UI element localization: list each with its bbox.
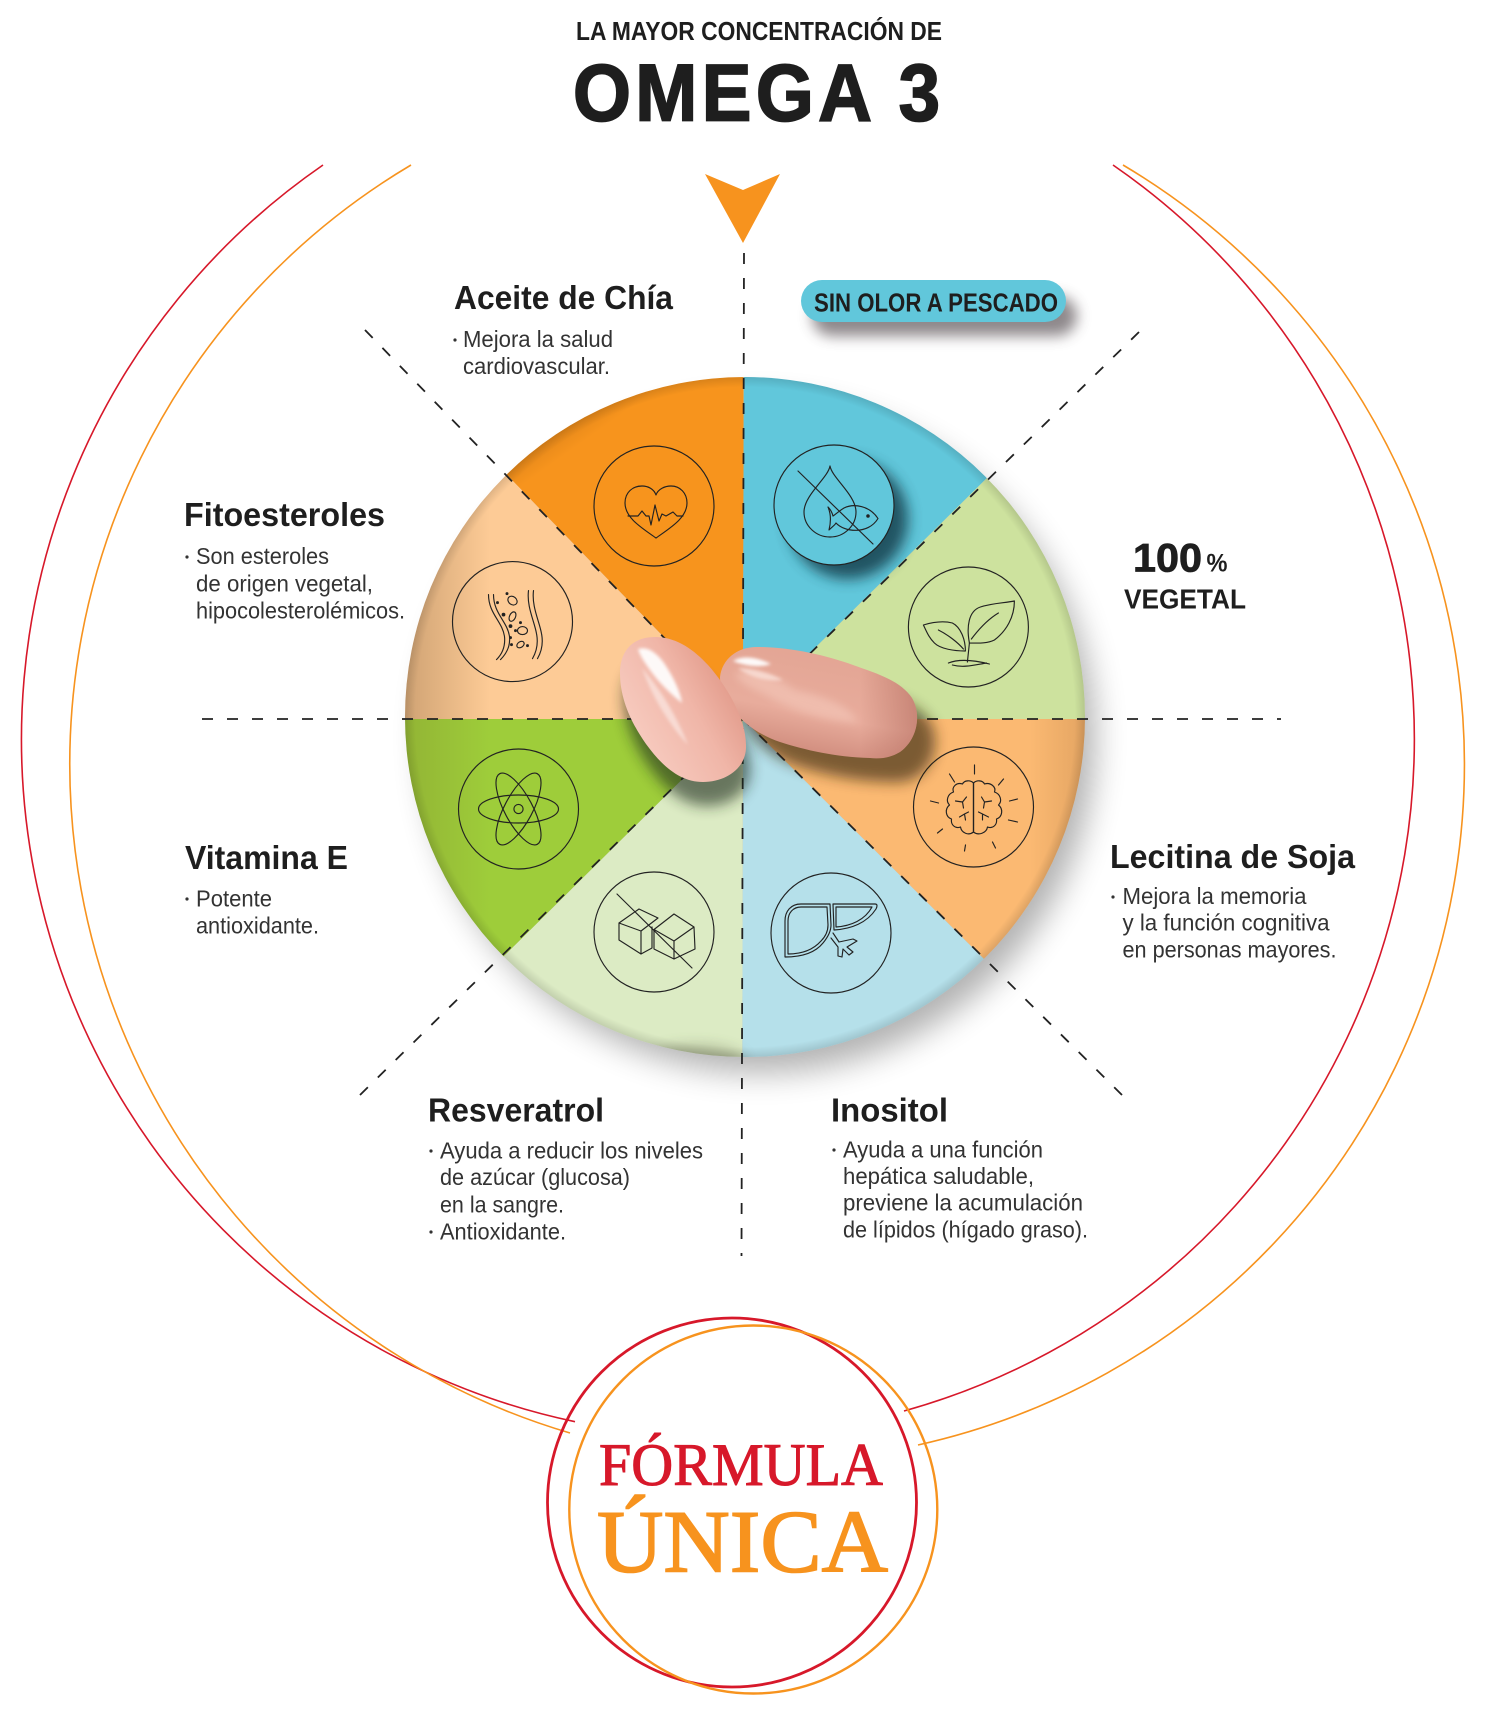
callout: 100% vegetal — [1124, 536, 1246, 614]
text block: fitoesteroles — [184, 496, 405, 624]
text block: inositol: de lípidos (hígado graso). — [843, 1216, 1088, 1242]
icon: brain — [914, 747, 1034, 867]
title: la mayor concentración de: LA MAYOR CONCENTRACIÓN DE — [576, 16, 942, 46]
dashed horizontal divider — [202, 718, 1281, 720]
pie chart — [405, 377, 1085, 1057]
text block: vitamina e: antioxidante. — [196, 912, 319, 938]
badge: sin olor a pescado: SIN OLOR A PESCADO — [814, 288, 1058, 318]
callout: 100% vegetal: % — [1206, 550, 1228, 578]
text block: inositol: Inositol — [831, 1092, 948, 1128]
text block: inositol: hepática saludable, — [843, 1163, 1034, 1189]
text block: fitoesteroles: Fitoesteroles — [184, 496, 385, 533]
icon: heart with pulse — [594, 446, 714, 566]
text block: aceite de chía — [453, 279, 674, 379]
text block: aceite de chía: Mejora la salud — [463, 326, 613, 352]
text block: vitamina e: Vitamina E — [185, 839, 348, 876]
badge: sin olor a pescado — [801, 280, 1077, 336]
text block: resveratrol: Antioxidante. — [440, 1218, 566, 1244]
text block: inositol — [831, 1092, 1088, 1242]
capsule: left — [620, 637, 746, 782]
arrow pointing down — [705, 174, 780, 243]
seal: fórmula única: FÓRMULA — [599, 1432, 883, 1498]
icon: no fish smell — [774, 445, 908, 579]
text block: lecitina de soja: y la función cognitiva — [1122, 910, 1330, 936]
text block: resveratrol: en la sangre. — [440, 1192, 564, 1218]
text block: aceite de chía: Aceite de Chía — [454, 279, 674, 316]
icon: no sugar cubes — [594, 872, 714, 992]
seal: fórmula única: ÚNICA — [597, 1494, 888, 1592]
text block: aceite de chía: cardiovascular. — [463, 353, 610, 379]
text block: resveratrol: Ayuda a reducir los niveles — [440, 1138, 703, 1164]
text block: fitoesteroles: Son esteroles — [196, 543, 329, 569]
callout: 100% vegetal: 100 — [1133, 536, 1202, 580]
icon: blood vessel with cholesterol — [452, 562, 572, 682]
text block: inositol: previene la acumulación — [843, 1190, 1083, 1216]
callout: 100% vegetal: VEGETAL — [1124, 584, 1246, 614]
icon: atom — [458, 749, 578, 869]
text block: fitoesteroles: hipocolesterolémicos. — [196, 598, 405, 624]
large red and orange arcs — [21, 165, 1464, 1445]
capsule shadows — [624, 661, 935, 806]
text block: vitamina e: Potente — [196, 886, 272, 912]
icon: plant — [908, 567, 1028, 687]
text block: resveratrol — [428, 1092, 703, 1244]
dashed diagonal dividers — [360, 330, 1139, 1095]
pie shadow — [425, 403, 1095, 1073]
text block: lecitina de soja: Lecitina de Soja — [1110, 838, 1356, 875]
capsule: right — [720, 647, 917, 758]
icon: liver — [771, 873, 891, 993]
text block: lecitina de soja: Mejora la memoria — [1122, 883, 1307, 909]
seal: fórmula única — [548, 1318, 937, 1694]
text block: inositol: Ayuda a una función — [843, 1136, 1043, 1162]
text block: resveratrol: Resveratrol — [428, 1092, 604, 1128]
dashed vertical divider — [742, 253, 744, 1256]
title: omega 3: OMEGA 3 — [573, 49, 940, 138]
text block: resveratrol: de azúcar (glucosa) — [440, 1164, 630, 1190]
text block: fitoesteroles: de origen vegetal, — [196, 570, 373, 596]
text block: lecitina de soja — [1110, 838, 1356, 962]
text block: lecitina de soja: en personas mayores. — [1122, 936, 1336, 962]
text block: vitamina e — [185, 839, 348, 938]
